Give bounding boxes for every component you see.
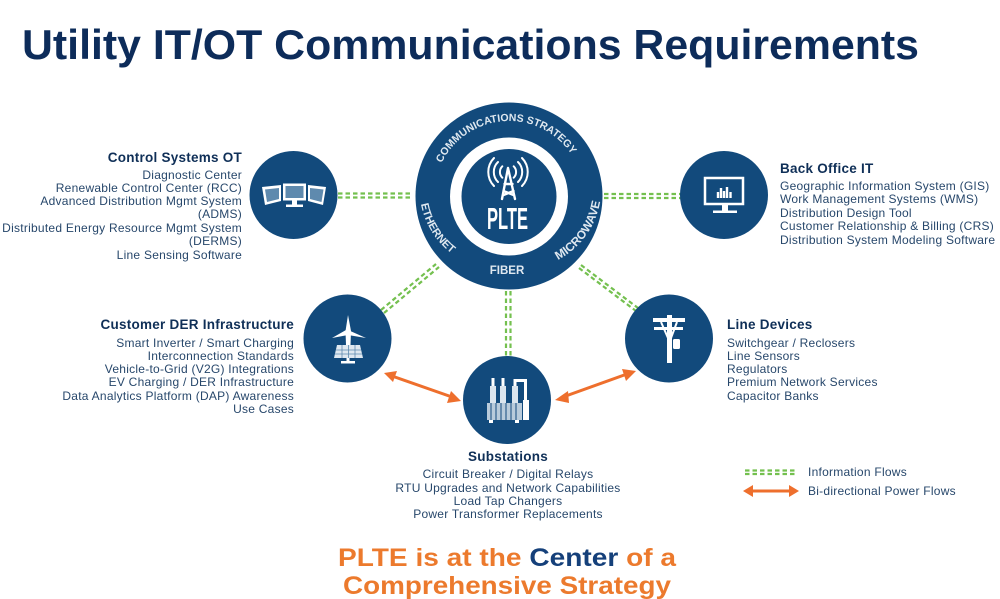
node: back office IT — [680, 151, 768, 239]
icon: radio tower — [488, 158, 528, 199]
icon: desktop monitor with chart — [705, 178, 743, 213]
text: substations: RTU Upgrades and Network Capabilities — [395, 481, 621, 495]
information flow connectors — [338, 194, 681, 356]
ring label: ethernet: ETHERNET — [421, 203, 456, 252]
text: control systems OT: (ADMS) — [198, 207, 242, 221]
legend: power flows: Bi-directional Power Flows — [808, 484, 956, 498]
text: customer DER infrastructure: EV Charging / DER Infrastructure — [109, 375, 294, 389]
legend — [743, 465, 956, 498]
text: back office IT: Distribution System Modeling Software — [780, 233, 995, 247]
text: back office IT: Customer Relationship & Billing (CRS) — [780, 219, 994, 233]
text: control systems OT: Diagnostic Center — [142, 168, 242, 182]
text: control systems OT: Advanced Distribution Mgmt System — [40, 194, 242, 208]
text: control systems OT: Distributed Energy Resource Mgmt System — [2, 221, 242, 235]
legend: information flows — [745, 465, 907, 479]
text: line devices: Line Sensors — [727, 349, 800, 363]
text: control systems OT: Renewable Control Center (RCC) — [56, 181, 242, 195]
text: back office IT — [780, 161, 995, 247]
text: back office IT: Geographic Information System (GIS) — [780, 179, 990, 193]
text: line devices: Line Devices — [727, 317, 813, 332]
text: customer DER infrastructure: Smart Inverter / Smart Charging — [116, 336, 294, 350]
text: substations: Circuit Breaker / Digital Relays — [423, 467, 593, 481]
node: line devices — [625, 294, 713, 382]
title: Utility IT/OT Communications Requirements — [22, 21, 919, 68]
text: control systems OT — [2, 150, 242, 262]
text: line devices: Regulators — [727, 362, 788, 376]
text: substations — [395, 449, 621, 521]
text: customer DER infrastructure: Data Analytics Platform (DAP) Awareness — [62, 389, 294, 403]
legend: power flows — [743, 484, 956, 498]
node: control systems OT — [250, 151, 338, 239]
node: customer DER infrastructure — [304, 294, 392, 382]
text: customer DER infrastructure: Interconnection Standards — [148, 349, 294, 363]
closing statement — [338, 544, 677, 599]
ring label: microwave: MICROWAVE — [554, 200, 600, 260]
ring label: communications strategy: COMMUNICATIONS STRATEGY — [436, 114, 578, 162]
legend: information flows: Information Flows — [808, 465, 907, 479]
icon: transformer — [487, 378, 529, 423]
bi-directional power arrows — [384, 369, 636, 403]
text: control systems OT: Control Systems OT — [108, 150, 242, 165]
text: customer DER infrastructure: Vehicle-to-Grid (V2G) Integrations — [105, 362, 294, 376]
closing statement: PLTE is at the Center of a — [338, 544, 677, 572]
text: line devices: Premium Network Services — [727, 375, 878, 389]
text: substations: Substations — [468, 449, 548, 464]
text: line devices: Capacitor Banks — [727, 389, 819, 403]
ring label: fiber: FIBER — [490, 265, 525, 277]
text: customer DER infrastructure — [62, 317, 294, 416]
icon: three monitors — [262, 184, 326, 207]
central communications strategy circle — [416, 102, 602, 290]
icon: utility pole — [653, 315, 685, 363]
text: line devices: Switchgear / Reclosers — [727, 336, 855, 350]
text: control systems OT: Line Sensing Software — [117, 248, 242, 262]
text: line devices — [727, 317, 878, 403]
text: customer DER infrastructure: Use Cases — [233, 402, 294, 416]
icon: wind turbine and solar panel — [332, 315, 366, 364]
node: substations — [463, 356, 551, 444]
text: back office IT: Distribution Design Tool — [780, 206, 912, 220]
text: substations: Power Transformer Replacements — [413, 507, 603, 521]
text: substations: Load Tap Changers — [454, 494, 562, 508]
text: customer DER infrastructure: Customer DER Infrastructure — [100, 317, 294, 332]
PLTE label: PLTE — [487, 201, 528, 236]
text: back office IT: Back Office IT — [780, 161, 874, 176]
text: control systems OT: (DERMS) — [189, 234, 242, 248]
text: back office IT: Work Management Systems (WMS) — [780, 192, 978, 206]
